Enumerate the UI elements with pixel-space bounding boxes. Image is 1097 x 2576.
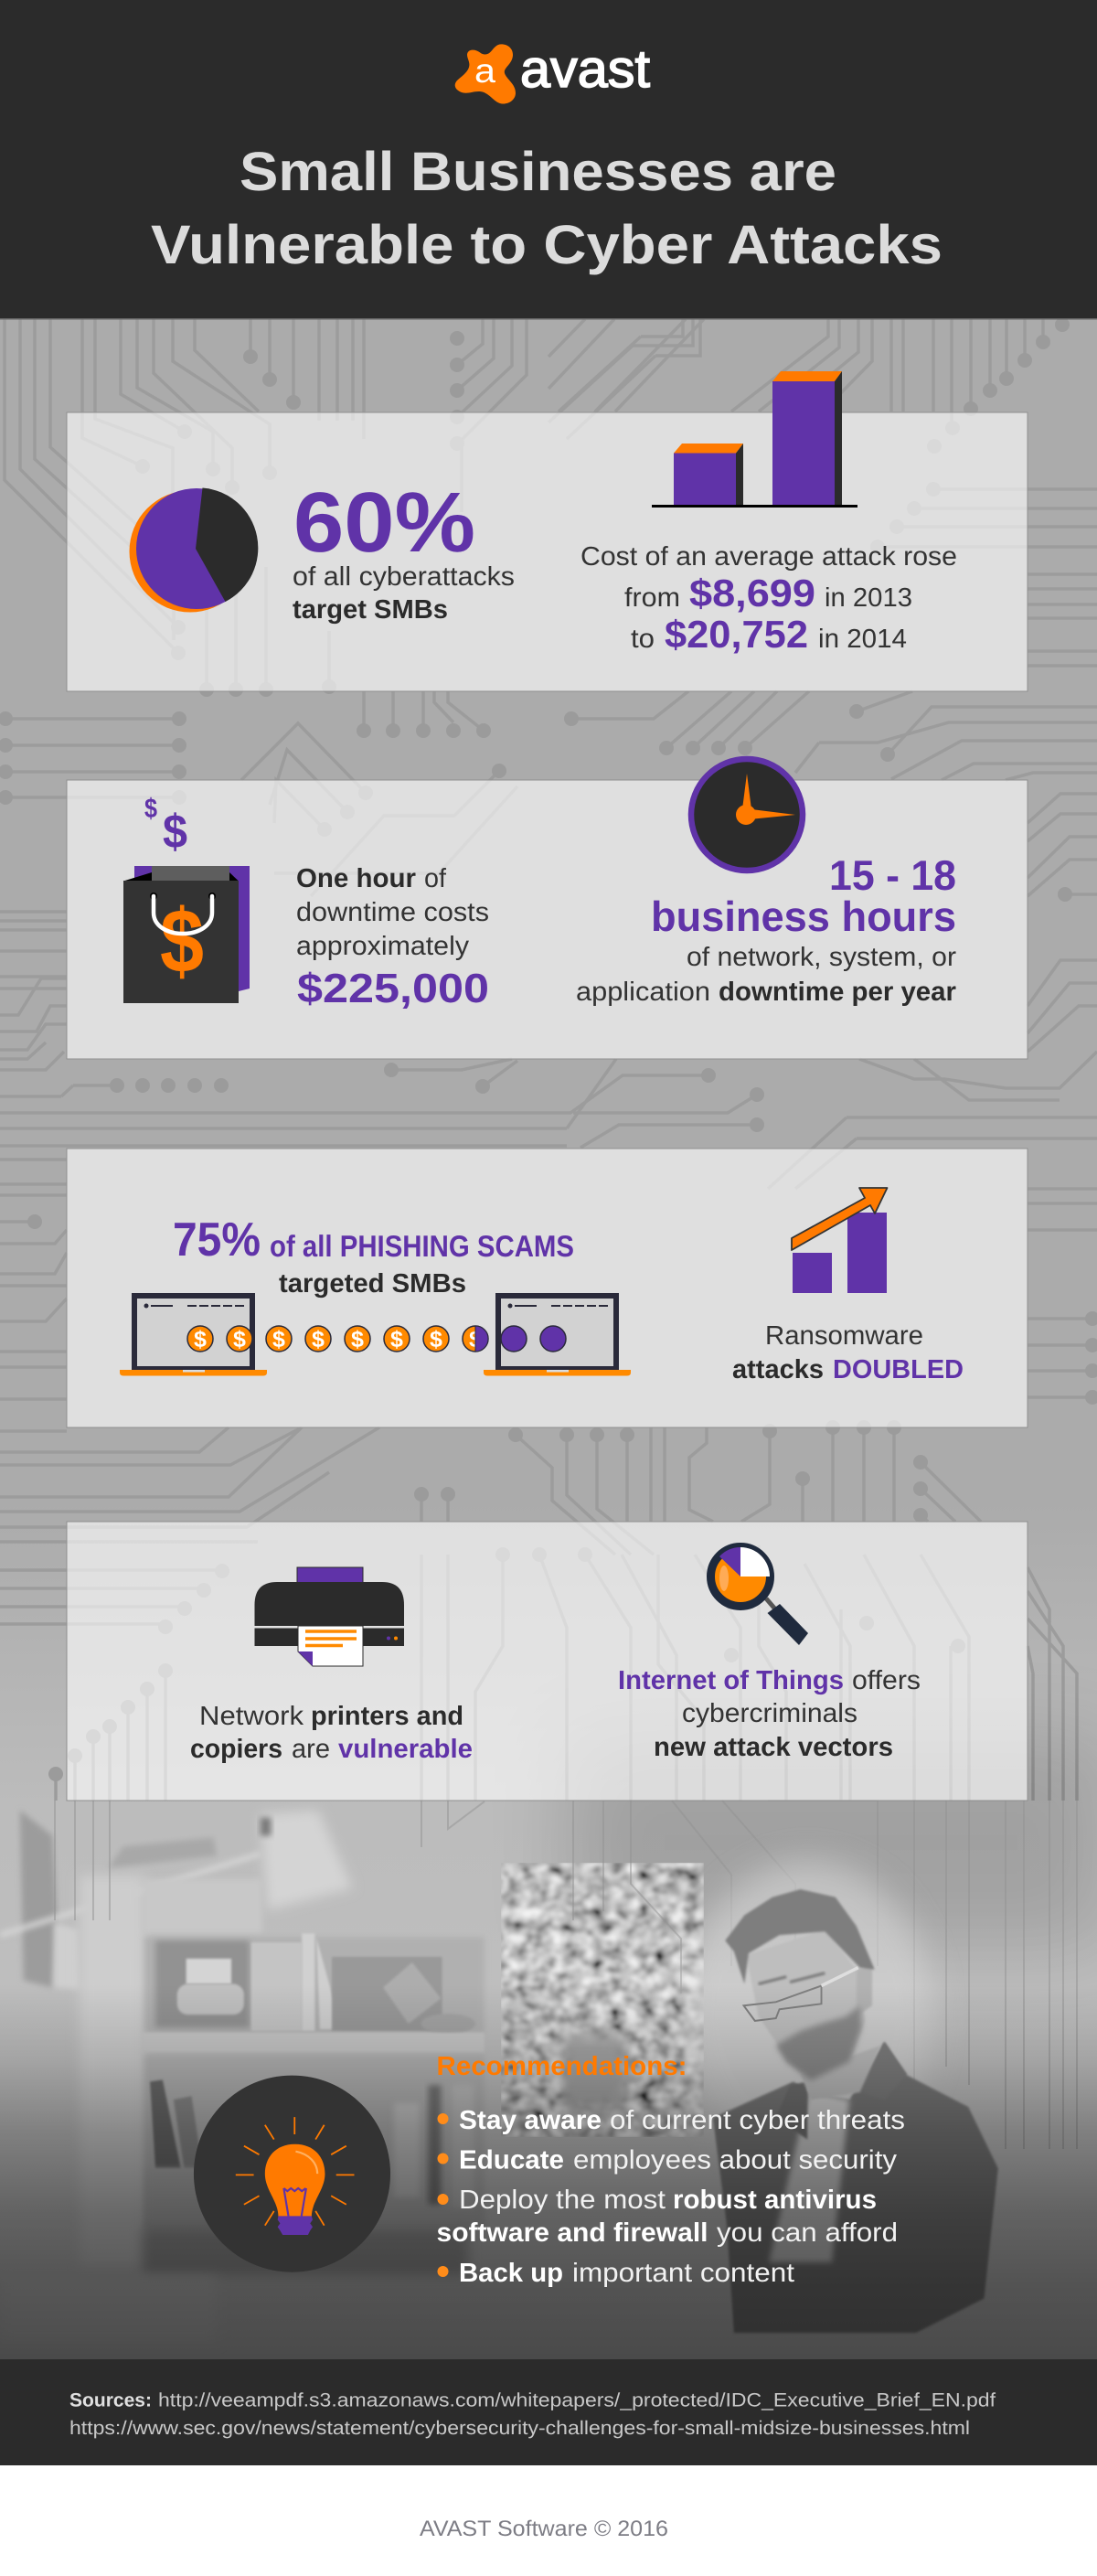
header band xyxy=(0,0,1097,320)
stat: 60% of all cyberattacks: target SMBs xyxy=(293,595,448,625)
stat: 15 - 18 business hours: downtime per year xyxy=(719,978,956,1007)
panel: phishing and ransomware xyxy=(67,1149,1028,1427)
stat: 75% phishing scams xyxy=(173,1213,574,1299)
text: ransomware attacks doubled: DOUBLED xyxy=(833,1355,964,1384)
list: deploy: you can afford xyxy=(717,2218,898,2248)
text: Internet of Things xyxy=(618,1666,921,1762)
bulb xyxy=(265,2144,325,2217)
avast logo: a xyxy=(474,52,495,90)
list: educate: Educate xyxy=(459,2145,564,2175)
stat: 15 - 18 business hours xyxy=(576,851,956,1007)
stat: 60% of all cyberattacks xyxy=(293,475,515,625)
avast logo: avast xyxy=(520,39,650,99)
text: Internet of Things: offers xyxy=(852,1666,921,1695)
stat: cost of an average attack: from xyxy=(624,583,680,613)
photo: blurred office with man at laptop xyxy=(0,1737,1097,2359)
stat: one hour of downtime: of xyxy=(424,864,447,893)
text: Internet of Things: new attack vectors xyxy=(654,1733,893,1762)
stat: one hour of downtime: $225,000 xyxy=(297,965,489,1011)
icon: falling dollar signs xyxy=(144,794,187,859)
text: Internet of Things: cybercriminals xyxy=(682,1699,857,1728)
text: network printers vulnerable: copiers xyxy=(190,1735,282,1764)
sources band: https://www.sec.gov/news/statement/cybersecurity-challenges-for-small-midsize-businesses.html xyxy=(69,2418,970,2439)
stat: cost of an average attack xyxy=(580,542,957,656)
stat: one hour of downtime: approximately xyxy=(296,932,470,961)
mosaic picture on the wall xyxy=(501,1863,704,2137)
stat: 75% phishing scams: 75% xyxy=(173,1213,261,1267)
stat: 15 - 18 business hours: of network, system, or xyxy=(687,943,956,972)
recommendations xyxy=(437,2052,905,2288)
list: deploy: Deploy the most xyxy=(459,2186,666,2215)
filament and base xyxy=(278,2188,313,2235)
text: Internet of Things: Internet of Things xyxy=(618,1666,844,1695)
text: ransomware attacks doubled: attacks xyxy=(732,1355,824,1384)
stat: 15 - 18 business hours: application xyxy=(576,978,710,1007)
stat: cost of an average attack: to xyxy=(631,625,655,654)
sources band xyxy=(0,2359,1097,2465)
list: stay aware: of current cyber threats xyxy=(610,2106,905,2135)
panel: 60% of attacks and rising cost xyxy=(67,371,1028,691)
coins moving between laptops xyxy=(187,1326,566,1352)
list: back up xyxy=(437,2259,794,2288)
icon: left laptop xyxy=(120,1296,267,1375)
coins moving between laptops: $ xyxy=(233,1327,246,1352)
icon: ransomware rising bars with arrow xyxy=(792,1188,887,1293)
stat: one hour of downtime: downtime costs xyxy=(296,898,489,927)
icon: right laptop xyxy=(484,1296,631,1375)
icon: magnifying glass over pie xyxy=(711,1547,808,1645)
stat: 60% of all cyberattacks: 60% xyxy=(293,475,475,570)
list: deploy: robust antivirus xyxy=(673,2186,877,2215)
icon: pie chart 60% xyxy=(130,488,258,613)
coins moving between laptops: $ xyxy=(390,1327,403,1352)
bulb highlight xyxy=(295,2152,317,2174)
circuit board background xyxy=(0,317,1097,2359)
text: network printers vulnerable xyxy=(190,1702,473,1764)
coins moving between laptops: $ xyxy=(430,1327,442,1352)
icon: bar chart xyxy=(652,371,857,508)
list: back up: Back up xyxy=(459,2259,563,2288)
icon: falling dollar signs: $ xyxy=(163,806,187,859)
room: poster, lamp and bookshelf xyxy=(0,1811,485,2342)
stat: cost of an average attack: $20,752 xyxy=(665,613,808,656)
text: network printers vulnerable: printers and xyxy=(311,1702,463,1731)
stat: 60% of all cyberattacks: of all cyberattacks xyxy=(293,562,515,592)
list: stay aware xyxy=(437,2106,905,2135)
text: ransomware attacks doubled xyxy=(732,1321,964,1384)
icon: light bulb in dark circle xyxy=(194,2076,390,2272)
stat: cost of an average attack: in 2013 xyxy=(825,583,912,613)
dark gradient overlay xyxy=(0,1984,1097,2359)
list: deploy: software and firewall xyxy=(437,2218,708,2248)
stat: cost of an average attack: in 2014 xyxy=(818,625,907,654)
stat: cost of an average attack: $8,699 xyxy=(689,572,815,615)
avast logo xyxy=(455,39,650,104)
stat: 75% phishing scams: of all PHISHING SCAMS xyxy=(270,1229,574,1263)
panel: printers and Internet of Things xyxy=(67,1522,1028,1801)
list: back up: important content xyxy=(572,2259,794,2288)
list: educate xyxy=(437,2145,898,2175)
panel: downtime cost and business hours xyxy=(67,759,1028,1059)
text: network printers vulnerable: vulnerable xyxy=(338,1735,473,1764)
icon: shopping bag with dollar xyxy=(123,866,250,1003)
footer xyxy=(0,2465,1097,2576)
stat: 15 - 18 business hours: 15 - 18 xyxy=(829,851,956,899)
text: ransomware attacks doubled: Ransomware xyxy=(765,1321,923,1351)
footer: AVAST Software © 2016 xyxy=(420,2517,668,2541)
stat: cost of an average attack: Cost of an average attack rose xyxy=(580,542,957,572)
coins moving between laptops: $ xyxy=(469,1327,482,1352)
coins moving between laptops: $ xyxy=(272,1327,285,1352)
stat: one hour of downtime: One hour xyxy=(296,864,416,893)
icon: shopping bag with dollar: $ xyxy=(160,890,204,991)
title xyxy=(151,141,943,275)
list: deploy xyxy=(437,2186,898,2248)
icon: printer xyxy=(254,1567,404,1666)
man at laptop xyxy=(681,1861,998,2333)
title: Vulnerable to Cyber Attacks xyxy=(151,214,943,275)
stat: 15 - 18 business hours: business hours xyxy=(651,893,956,940)
coins moving between laptops: $ xyxy=(351,1327,364,1352)
recommendations: Recommendations: xyxy=(437,2052,687,2081)
rays xyxy=(236,2117,354,2226)
stat: 75% phishing scams: targeted SMBs xyxy=(279,1269,466,1299)
text: network printers vulnerable: Network xyxy=(199,1702,304,1731)
title: Small Businesses are xyxy=(240,141,836,202)
text: network printers vulnerable: are xyxy=(292,1735,330,1764)
faint wall lines xyxy=(55,1801,1077,2149)
icon: clock xyxy=(691,759,803,871)
list: educate: employees about security xyxy=(573,2145,898,2175)
icon: falling dollar signs: $ xyxy=(144,794,157,824)
coins moving between laptops: $ xyxy=(312,1327,325,1352)
stat: one hour of downtime xyxy=(296,864,489,1011)
list: stay aware: Stay aware xyxy=(459,2106,602,2135)
coins moving between laptops: $ xyxy=(194,1327,207,1352)
sources band: Sources: xyxy=(69,2390,152,2410)
sources band: http://veeampdf.s3.amazonaws.com/whitepapers/_protected/IDC_Executive_Brief_EN.pdf xyxy=(158,2390,996,2410)
